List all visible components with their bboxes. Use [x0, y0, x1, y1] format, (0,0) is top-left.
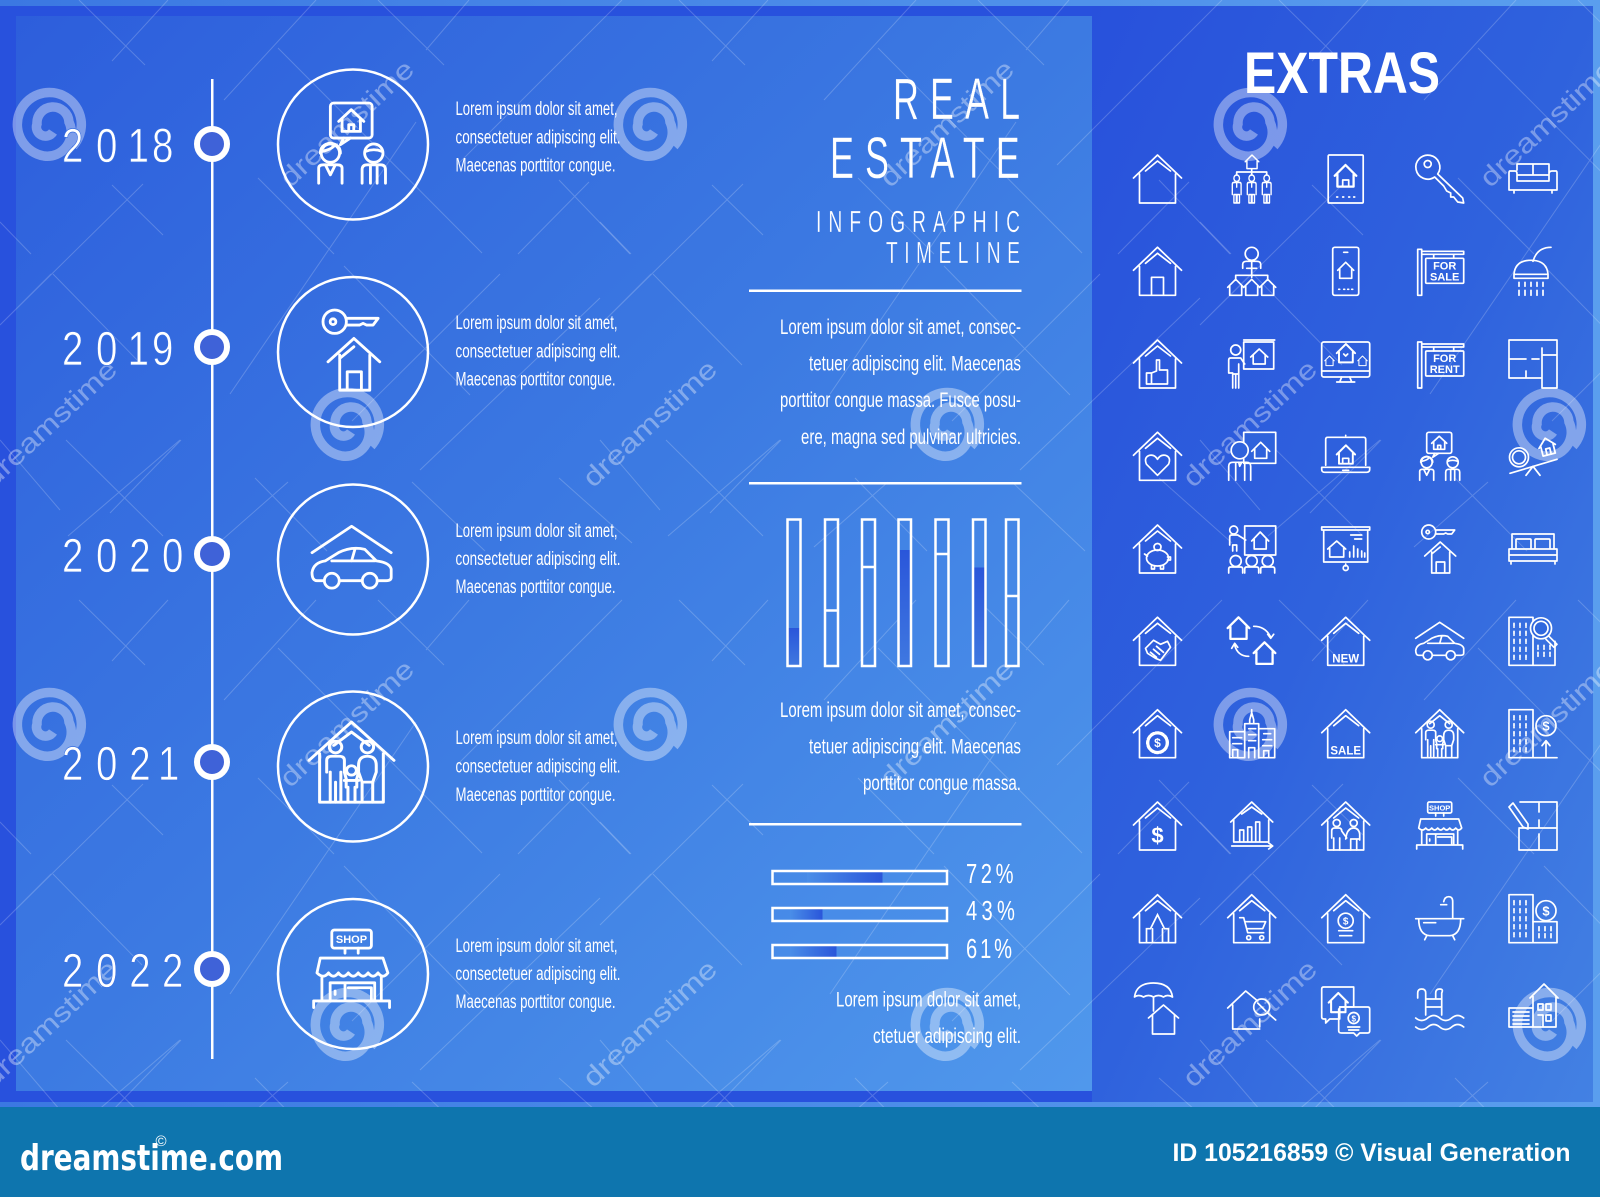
title — [830, 67, 1020, 191]
subtitle — [816, 206, 1020, 270]
icon: city skyline — [1230, 710, 1275, 758]
watermark pattern: dreamstime — [274, 654, 420, 793]
icon: agent presenting house — [1229, 340, 1275, 388]
icon: for sale sign — [1418, 249, 1464, 295]
year 2022: 2022 — [62, 945, 183, 998]
icon: monitor houses — [1322, 342, 1370, 382]
bar 72% — [772, 859, 1014, 890]
dividers — [749, 290, 1022, 826]
icon: key — [1416, 155, 1464, 203]
circle icon: shop — [278, 899, 428, 1049]
footer logo: dreamstime.com — [20, 1138, 283, 1179]
circle icon: garage car — [278, 484, 428, 634]
paragraph 2 — [780, 699, 1021, 795]
paragraph 1: ere, magna sed pulvinar ultricies. — [801, 426, 1021, 449]
watermark pattern: dreamstime — [1474, 654, 1600, 793]
icon: laptop house — [1322, 435, 1370, 472]
bar 72%: 72% — [966, 859, 1014, 890]
text 2021: Maecenas porttitor congue. — [456, 785, 616, 806]
icon: handshake house — [1134, 617, 1182, 665]
panel: extras background — [1092, 6, 1593, 1102]
text 2020: Maecenas porttitor congue. — [456, 577, 616, 598]
icon: building with coin: $ — [1542, 904, 1550, 919]
circle icon: agents and house — [278, 70, 428, 220]
icon: couple house — [1322, 802, 1370, 850]
text 2019 — [456, 313, 620, 390]
icon: house with garage — [1509, 984, 1558, 1027]
heading: extras: EXTRAS — [1244, 41, 1440, 106]
icon: chat house and coin — [1322, 987, 1370, 1036]
node 2022 — [197, 954, 227, 984]
paragraph 1 — [780, 316, 1021, 449]
icon: team hierarchy — [1232, 155, 1271, 203]
text 2022: consectetuer adipiscing elit. — [456, 964, 620, 985]
icon: agents with house bubble — [1420, 432, 1460, 480]
watermark pattern: dreamstime — [874, 54, 1020, 193]
icon: house search — [1228, 991, 1276, 1029]
icon: garage car — [1416, 622, 1464, 660]
subtitle: INFOGRAPHIC — [816, 206, 1020, 239]
icon: house exchange — [1228, 617, 1275, 664]
year 2018: 2018 — [62, 120, 173, 173]
icon: floor plan with pencil — [1509, 802, 1557, 850]
footer bar — [0, 1107, 1600, 1197]
paragraph 3: Lorem ipsum dolor sit amet, — [836, 988, 1021, 1012]
icon: dollar house: $ — [1151, 823, 1164, 848]
bar 43%: 43% — [966, 896, 1015, 927]
icon: building value up: $ — [1542, 719, 1550, 734]
icon: for rent sign: RENT — [1430, 364, 1460, 376]
paragraph 1: Lorem ipsum dolor sit amet, consec- — [780, 316, 1021, 339]
watermark pattern: dreamstime — [1474, 54, 1600, 193]
text 2018: consectetuer adipiscing elit. — [456, 128, 620, 148]
icon: house heart — [1134, 432, 1182, 480]
footer credit: ID 105216859 © Visual Generation — [1172, 1139, 1570, 1167]
text 2020: Lorem ipsum dolor sit amet, — [456, 521, 618, 542]
circle icon: shop: SHOP — [336, 934, 367, 946]
horizontal progress bars — [772, 859, 1015, 965]
vertical bar chart — [788, 520, 1018, 666]
icon: projector chart — [1322, 527, 1370, 570]
icon: sofa — [1509, 164, 1557, 193]
node 2019 — [197, 332, 227, 362]
paragraph 2: Lorem ipsum dolor sit amet, consec- — [780, 699, 1021, 722]
watermark pattern: dreamstime — [577, 354, 723, 493]
title: ESTATE — [830, 126, 1020, 191]
icon: phone house — [1333, 247, 1359, 295]
icon: shop: SHOP — [1429, 804, 1450, 812]
icon: coin house: $ — [1343, 917, 1349, 928]
icon: piggy bank house — [1134, 525, 1182, 573]
icon: building search — [1509, 617, 1557, 665]
timeline item 2022 — [62, 899, 620, 1049]
timeline item 2020 — [62, 484, 620, 634]
year 2019: 2019 — [62, 323, 173, 376]
icon: bathtub — [1416, 897, 1464, 940]
text 2020: consectetuer adipiscing elit. — [456, 549, 620, 570]
panel: main timeline background — [16, 16, 1092, 1091]
text 2021: consectetuer adipiscing elit. — [456, 756, 620, 778]
icon: manager and houses — [1228, 247, 1276, 295]
paragraph 2: porttitor congue massa. — [863, 772, 1021, 795]
subtitle: TIMELINE — [886, 237, 1020, 270]
icon: building with coin — [1509, 895, 1557, 943]
icon: umbrella house — [1134, 983, 1178, 1034]
icon: for sale sign: FOR — [1433, 260, 1456, 272]
text 2022 — [456, 936, 620, 1013]
icon: bed — [1509, 534, 1557, 564]
icon: presenter and audience — [1229, 526, 1276, 573]
timeline item 2019 — [62, 277, 620, 427]
node 2018 — [197, 129, 227, 159]
text 2019: Maecenas porttitor congue. — [456, 370, 616, 390]
icon: house with door — [1134, 247, 1182, 295]
title: REAL — [893, 67, 1020, 132]
icon: for sale sign: SALE — [1430, 271, 1459, 283]
bar 61% — [772, 934, 1012, 965]
icon: sale house — [1322, 710, 1370, 758]
icon: shower — [1514, 247, 1551, 295]
paragraph 3 — [836, 988, 1021, 1048]
icon: cart house — [1228, 895, 1276, 943]
icon: dollar house — [1134, 802, 1182, 850]
icon: swimming pool ladder — [1416, 989, 1464, 1030]
icon: tablet house — [1328, 155, 1363, 203]
icon: house — [1134, 155, 1182, 203]
paragraph 1: porttitor congue massa. Fusce posu- — [780, 389, 1021, 412]
icon: house up arrow — [1134, 895, 1182, 943]
extras icon grid — [1134, 155, 1558, 1036]
text 2018: Lorem ipsum dolor sit amet, — [456, 99, 618, 120]
watermark pattern: dreamstime — [1177, 954, 1323, 1093]
icon: settings dollar house — [1134, 710, 1182, 758]
bar 43% — [772, 896, 1015, 927]
timeline axis — [211, 79, 214, 1059]
text 2020 — [456, 521, 620, 598]
icon: person with board — [1229, 432, 1276, 480]
icon: money versus house scale — [1510, 436, 1557, 475]
node 2020 — [197, 539, 227, 569]
icon: floor plan — [1509, 340, 1557, 388]
node 2021 — [197, 747, 227, 777]
year 2021: 2021 — [62, 738, 179, 791]
text 2021 — [456, 728, 620, 806]
icon: key and house — [1422, 525, 1456, 573]
icon: coin house — [1322, 895, 1370, 943]
year 2020: 2020 — [62, 530, 183, 583]
icon: for rent sign — [1418, 342, 1464, 388]
icon: building value up — [1509, 710, 1557, 758]
text 2018: Maecenas porttitor congue. — [456, 156, 616, 176]
icon: for rent sign: FOR — [1433, 353, 1456, 365]
timeline item 2018 — [62, 70, 620, 220]
watermark pattern: dreamstime — [274, 54, 420, 193]
circle icon: family house — [278, 692, 428, 842]
paragraph 1: tetuer adipiscing elit. Maecenas — [809, 352, 1021, 376]
paragraph 2: tetuer adipiscing elit. Maecenas — [809, 736, 1021, 758]
bar 61%: 61% — [966, 934, 1012, 965]
text 2018 — [456, 99, 620, 176]
icon: house thumbs up — [1134, 340, 1182, 388]
watermark pattern: dreamstime — [1177, 354, 1323, 493]
icon: shop — [1417, 802, 1463, 849]
icon: settings dollar house: $ — [1154, 736, 1161, 750]
icon: family house — [1416, 710, 1464, 758]
icon: chat house and coin: $ — [1351, 1014, 1356, 1024]
timeline item 2021 — [62, 692, 620, 842]
circle icon: key and house — [278, 277, 428, 427]
watermark pattern: dreamstime — [874, 654, 1020, 793]
text 2019: consectetuer adipiscing elit. — [456, 342, 620, 362]
icon: sale house: SALE — [1330, 746, 1361, 758]
paragraph 3: ctetuer adipiscing elit. — [873, 1025, 1021, 1048]
icon: chart house — [1231, 802, 1273, 849]
icon: new house: NEW — [1332, 653, 1359, 665]
text 2022: Lorem ipsum dolor sit amet, — [456, 936, 618, 957]
text 2019: Lorem ipsum dolor sit amet, — [456, 313, 618, 334]
text 2022: Maecenas porttitor congue. — [456, 992, 616, 1013]
watermark pattern: dreamstime — [577, 954, 723, 1093]
text 2021: Lorem ipsum dolor sit amet, — [456, 728, 618, 749]
footer logo: © — [155, 1133, 167, 1150]
icon: new house — [1322, 617, 1370, 665]
